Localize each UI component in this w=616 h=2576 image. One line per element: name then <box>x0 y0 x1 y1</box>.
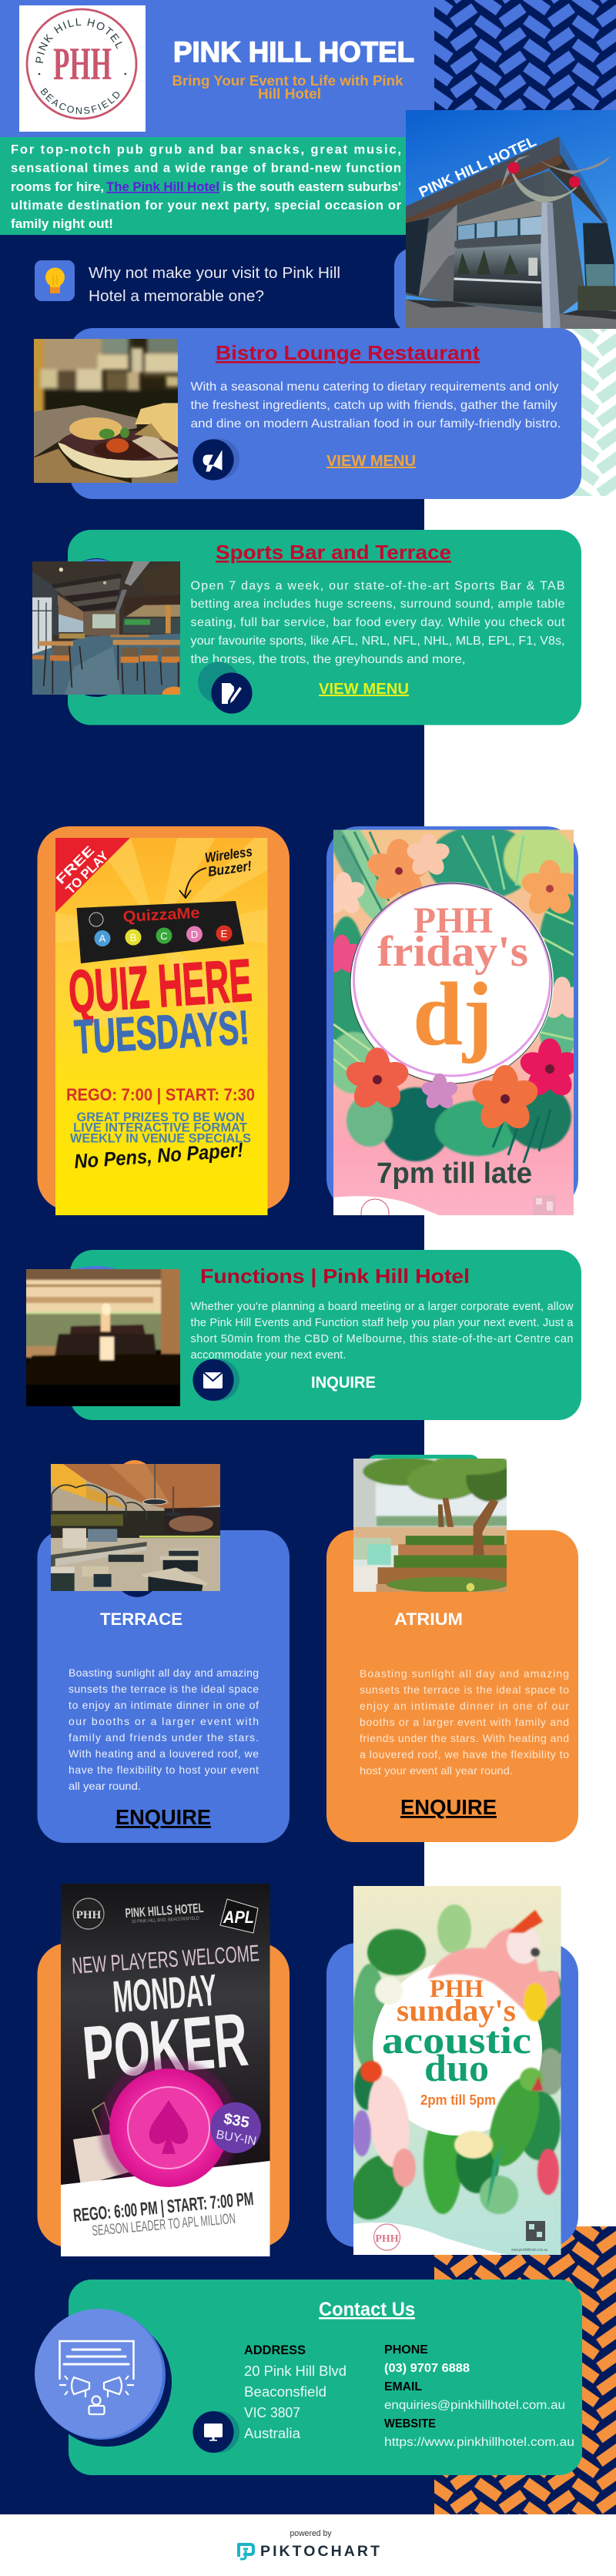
text: terrace: With heating and a louvered roof, we <box>69 1747 259 1760</box>
text: terrace: sunsets the terrace is the ideal space <box>69 1683 259 1695</box>
heading: sports: Sports Bar and Terrace <box>216 541 451 564</box>
poster: monday poker: 20 PINK HILL BVD, BEACONSFIELD <box>132 1916 200 1924</box>
poster: quiz tuesdays: QuizzaMe <box>122 905 200 926</box>
text: atrium: a louvered roof, we have the flexibility to <box>360 1748 569 1760</box>
text: terrace: our booths or a larger event with <box>69 1715 259 1727</box>
poster: sunday acoustic duo: 2pm till 5pm <box>420 2092 496 2108</box>
poster: quiz tuesdays: Wireless <box>204 844 253 866</box>
intro text: is the south eastern suburbs' <box>223 180 401 194</box>
text: contact details: EMAIL <box>384 2380 422 2393</box>
photo: atrium tree <box>353 1459 507 1592</box>
link: enquire: ENQUIRE <box>116 1805 211 1829</box>
poster: sunday acoustic duo: acoustic <box>382 2018 531 2062</box>
poster: monday poker: PINK HILLS HOTEL <box>125 1901 204 1921</box>
panel: bistro lounge <box>28 328 581 499</box>
tagline: Why not make your visit to Pink Hill <box>89 264 340 282</box>
panel: atrium <box>326 1454 578 1842</box>
poster: quiz tuesdays: REGO: 7:00 | START: 7:30 <box>66 1085 255 1104</box>
title: PINK HILL HOTEL <box>173 35 414 68</box>
intro text: ultimate destination for your next party, special occasion or <box>11 199 402 213</box>
panel: poker poster <box>37 1884 290 2256</box>
text: terrace: to enjoy an intimate dinner in one of <box>69 1699 259 1711</box>
pattern: blue brick top right <box>434 0 616 110</box>
intro text: family night out! <box>11 217 113 231</box>
blue shape behind hotel photo <box>394 248 471 333</box>
photo: hotel exterior <box>406 110 616 329</box>
pattern: mint brick right <box>434 329 616 496</box>
poster: sunday acoustic duo: duo <box>424 2046 489 2089</box>
poster: quiz tuesdays: D <box>191 929 198 940</box>
poster: quiz tuesdays: B <box>130 932 136 943</box>
poster: quiz tuesdays: No Pens, No Paper! <box>73 1138 244 1173</box>
text: address: ADDRESS <box>244 2343 306 2357</box>
text: functions: accommodate your next event. <box>191 1349 346 1362</box>
poster: monday poker: BUY-IN <box>215 2129 257 2149</box>
poster: friday dj: 7pm till late <box>377 1157 532 1190</box>
footer: powered by piktochart: PIKTOCHART <box>260 2543 380 2560</box>
photo: hotel exterior: PINK HILL HOTEL <box>417 132 538 200</box>
poster: monday poker: APL <box>223 1908 254 1927</box>
text: address <box>244 2343 346 2441</box>
text: terrace: Boasting sunlight all day and amazing <box>69 1667 259 1679</box>
poster: quiz tuesdays: C <box>160 930 168 942</box>
poster: quiz tuesdays: A <box>99 933 106 944</box>
text: address: 20 Pink Hill Blvd <box>244 2363 346 2379</box>
panel: terrace <box>37 1460 290 1843</box>
text: atrium: booths or a larger event with family and <box>360 1716 569 1728</box>
logo <box>19 5 146 132</box>
link: enquire: ENQUIRE <box>400 1795 497 1819</box>
text: terrace: all year round. <box>69 1780 141 1792</box>
text: sports: seating, full bar service, bar food every day. While you check out <box>191 616 565 629</box>
intro text: For top-notch pub grub and bar snacks, great music, <box>11 143 401 157</box>
text: sports <box>191 579 565 666</box>
panel: acoustic poster <box>326 1886 578 2255</box>
intro text: The Pink Hill Hotel <box>106 180 219 194</box>
text: atrium <box>360 1667 569 1777</box>
poster: quiz tuesdays: WEEKLY IN VENUE SPECIALS <box>70 1132 251 1146</box>
icon: monitor <box>192 2411 239 2453</box>
text: functions: the Pink Hill Events and Function staff help you plan your next event. Just a <box>191 1317 574 1329</box>
panel: quiz poster <box>37 826 290 1215</box>
text: atrium: sunsets the terrace is the ideal space to <box>360 1683 569 1696</box>
icon: light bulb <box>35 260 75 301</box>
poster: friday dj: PHH <box>413 900 493 941</box>
poster: quiz tuesdays: LIVE INTERACTIVE FORMAT <box>73 1121 247 1135</box>
text: functions: short 50min from the CBD of Melbourne, this state-of-the-art Centre can <box>191 1333 573 1345</box>
photo: candle lit tables <box>26 1269 180 1406</box>
text: contact details: WEBSITE <box>384 2417 436 2430</box>
panel: contact <box>35 2280 582 2475</box>
heading: contact us: Contact Us <box>319 2299 415 2320</box>
tagline <box>89 264 340 305</box>
poster: monday poker: PHH <box>76 1909 102 1921</box>
link: view menu: VIEW MENU <box>319 681 409 698</box>
poster: monday poker <box>61 1884 270 2256</box>
panel: dj poster <box>320 814 593 1227</box>
poster: sunday acoustic duo: sunday's <box>397 1993 516 2028</box>
icon: document and pen <box>198 662 253 714</box>
panel: sports bar <box>31 530 581 725</box>
poster: friday dj: dj <box>413 963 493 1064</box>
text: bistro: the freshest ingredients, catch up with friends, gather the family <box>191 399 557 412</box>
heading: bistro: Bistro Lounge Restaurant <box>216 341 480 364</box>
text: atrium: Boasting sunlight all day and amazing <box>360 1667 569 1680</box>
photo: sports bar interior <box>32 561 180 695</box>
text: terrace: family and friends under the stars. <box>69 1731 259 1744</box>
text: contact details: (03) 9707 6888 <box>384 2362 470 2375</box>
poster: quiz tuesdays: FREE <box>53 843 97 887</box>
text: sports: betting area includes huge screens, surround sound, ample table <box>191 598 565 611</box>
poster: quiz tuesdays <box>53 838 268 1215</box>
pattern: orange brick bottom right <box>434 2226 616 2514</box>
text: atrium: host your event all year round. <box>360 1764 513 1777</box>
text: terrace: have the flexibility to host your event <box>69 1764 259 1776</box>
text: bistro <box>191 380 561 430</box>
footer: powered by piktochart: powered by <box>290 2529 332 2538</box>
intro text: sensational times and a wide range of brand-new function <box>11 162 401 176</box>
text: address: Beaconsfield <box>244 2384 326 2400</box>
panel: intro band <box>0 137 406 235</box>
text: sports: the horses, the trots, the greyhounds and more, <box>191 653 465 666</box>
text: functions <box>191 1301 574 1362</box>
text: terrace <box>69 1667 259 1792</box>
text: atrium: enjoy an intimate dinner in one of our <box>360 1700 569 1712</box>
photo: bistro food <box>34 339 178 483</box>
icon: megaphone <box>192 438 239 481</box>
tagline: Hotel a memorable one? <box>89 287 264 305</box>
subtitle: Bring Your Event to Life with Pink <box>172 72 403 89</box>
text: contact details: PHONE <box>384 2343 428 2357</box>
poster: friday dj: friday's <box>377 928 528 976</box>
poster: quiz tuesdays: GREAT PRIZES TO BE WON <box>77 1110 245 1124</box>
text: sports: Open 7 days a week, our state-of-the-art Sports Bar & TAB <box>191 579 565 593</box>
text: sports: your favourite sports, like AFL, NRL, NFL, NHL, MLB, EPL, F1, V8s, <box>191 635 565 648</box>
link: view menu: VIEW MENU <box>326 453 416 470</box>
icon: envelope <box>192 1359 239 1401</box>
text: bistro: and dine on modern Australian food in our family-friendly bistro. <box>191 417 561 430</box>
footer: powered by piktochart <box>239 2529 380 2560</box>
subtitle <box>172 72 403 102</box>
text: atrium: friends under the stars. With heating and <box>360 1732 569 1744</box>
logo: PINK HILL HOTEL <box>35 18 122 63</box>
poster: quiz tuesdays: E <box>221 928 228 940</box>
illustration: announcement circle <box>35 2309 172 2447</box>
poster: sunday acoustic duo: PHH <box>430 1975 484 2003</box>
text: address: Australia <box>244 2426 301 2441</box>
poster: sunday acoustic duo: PHH <box>375 2233 399 2245</box>
poster: sunday acoustic duo: www.pinkhillhotel.com.au <box>511 2248 547 2253</box>
subtitle: Hill Hotel <box>258 85 321 102</box>
logo: BEACONSFIELD <box>40 88 120 114</box>
text: contact details: https://www.pinkhillhotel.com.au <box>384 2436 574 2449</box>
panel: functions <box>22 1250 581 1420</box>
text: contact details <box>384 2343 574 2449</box>
poster: friday dj <box>333 830 574 1215</box>
intro text: rooms for hire, <box>11 180 104 194</box>
photo: terrace interior <box>51 1464 220 1591</box>
poster: monday poker: $35 <box>223 2110 250 2132</box>
poster: quiz tuesdays: Buzzer! <box>207 858 253 879</box>
intro text <box>11 143 402 231</box>
heading: terrace: TERRACE <box>100 1610 182 1629</box>
link: inquire: INQUIRE <box>311 1374 376 1392</box>
heading: functions: Functions | Pink Hill Hotel <box>200 1265 470 1288</box>
text: functions: Whether you're planning a board meeting or a larger corporate event, allow <box>191 1301 574 1313</box>
poster: sunday acoustic duo <box>353 1886 561 2255</box>
poster: quiz tuesdays: TO PLAY <box>63 848 112 897</box>
logo: PHH <box>53 39 112 89</box>
text: contact details: enquiries@pinkhillhotel.com.au <box>384 2399 565 2412</box>
text: bistro: With a seasonal menu catering to dietary requirements and only <box>191 380 559 394</box>
heading: atrium: ATRIUM <box>394 1610 463 1629</box>
text: address: VIC 3807 <box>244 2405 300 2420</box>
